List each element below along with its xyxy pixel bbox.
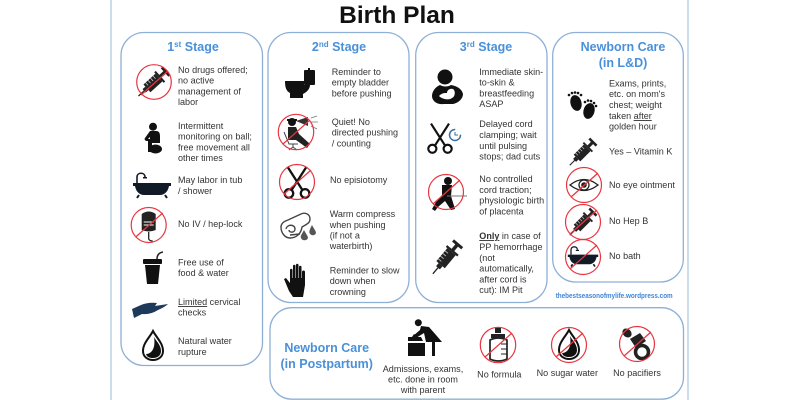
text: cord traction: of placenta: [479, 206, 525, 216]
icon: warm towel: [281, 213, 316, 240]
text: warm compress: Warm compress: [330, 209, 396, 219]
text: no drugs: No drugs offered;: [178, 65, 248, 75]
icon: no eye ointment: [566, 168, 602, 202]
text: hemorrhage: in case of: [499, 231, 541, 241]
text: water rupture: Natural water: [178, 336, 232, 346]
text: admissions: Admissions, exams,: [383, 364, 463, 374]
icon: no episiotomy: [280, 164, 314, 200]
icon: quiet no directed pushing: [278, 114, 318, 150]
text: no drugs: labor: [178, 97, 198, 107]
icon: changing table: [408, 319, 442, 356]
text: exams: after: [634, 111, 652, 121]
text: skin to skin: breastfeeding: [479, 88, 534, 98]
text: eye ointment: No eye ointment: [609, 180, 675, 190]
panel: 1st stage: [121, 32, 262, 366]
heading: 2nd stage: 2: [312, 40, 319, 54]
text: slow down: crowning: [330, 287, 366, 297]
text: skin to skin: ASAP: [479, 99, 503, 109]
icon: cup: [143, 252, 163, 284]
icon: no pacifiers: [620, 326, 654, 362]
text: tub: May labor in tub: [178, 175, 242, 185]
text: monitoring: free movement all: [178, 142, 250, 152]
text: hemorrhage: PP hemorrhage: [479, 242, 543, 252]
icon: raised hand: [284, 264, 305, 297]
text: warm compress: (if not a: [330, 231, 361, 241]
text: monitoring: other times: [178, 153, 223, 163]
icon: baby feet: [568, 91, 597, 120]
text: hemorrhage: after cord is: [479, 274, 527, 284]
text: cord traction: physiologic birth: [479, 196, 544, 206]
text: water rupture: rupture: [178, 347, 207, 357]
text: food and water: Free use of: [178, 258, 224, 268]
text: quiet: Quiet! No: [332, 117, 370, 127]
text: bladder: before pushing: [332, 88, 392, 98]
text: cord traction: cord traction;: [479, 185, 532, 195]
text: cervical checks: cervical: [207, 297, 240, 307]
text: admissions: etc. done in room: [388, 374, 458, 384]
text: hemorrhage: cut): IM Pit: [479, 285, 523, 295]
text: vitamin K: Yes – Vitamin K: [609, 146, 672, 156]
text: no IV: No IV / hep-lock: [178, 219, 243, 229]
panel: 2nd stage: [268, 32, 409, 302]
text: hemorrhage: (not: [479, 253, 495, 263]
text: skin to skin: Immediate skin-: [479, 67, 543, 77]
text: hep B: No Hep B: [609, 216, 648, 226]
text: admissions: with parent: [400, 385, 446, 395]
text: hemorrhage: Only: [479, 231, 499, 241]
text: warm compress: when pushing: [329, 220, 386, 230]
heading: 2nd stage: nd: [319, 40, 329, 49]
text: slow down: Reminder to slow: [330, 266, 400, 276]
icon: no formula: [480, 327, 516, 363]
text: bladder: Reminder to: [332, 67, 381, 77]
text: bath: No bath: [609, 251, 641, 261]
text: cervical checks: Limited: [178, 297, 207, 307]
source url: thebestseasonofmylife.wordpress.com: [556, 293, 673, 300]
text: no drugs: no active: [178, 76, 214, 86]
icon: water drop: [143, 331, 163, 360]
heading: 3rd stage: Stage: [475, 40, 512, 54]
icon: no drugs syringe: [134, 65, 171, 101]
text: slow down: down when: [330, 276, 375, 286]
text: hemorrhage: automatically,: [479, 264, 534, 274]
heading: newborn care L&D: (in L&D): [599, 56, 647, 70]
heading: newborn care postpartum: Newborn Care: [284, 341, 369, 355]
text: formula: No formula: [477, 370, 522, 380]
icon: bathtub: [133, 173, 171, 198]
text: delayed clamping: clamping; wait: [479, 130, 537, 140]
text: delayed clamping: until pulsing: [479, 141, 527, 151]
text: food and water: food & water: [178, 268, 229, 278]
text: tub: / shower: [178, 186, 212, 196]
text: cervical checks: checks: [178, 308, 207, 318]
text: monitoring: Intermittent: [178, 121, 224, 131]
text: pacifiers: No pacifiers: [613, 368, 661, 378]
heading: newborn care postpartum: (in Postpartum): [281, 357, 373, 371]
icon: hand: [132, 303, 168, 318]
panel: 3rd stage: [416, 32, 547, 302]
icon: no bath: [566, 240, 600, 274]
text: bladder: empty bladder: [332, 78, 389, 88]
text: exams: taken: [609, 111, 634, 121]
panel: newborn care postpartum: [270, 308, 684, 399]
icon: syringe: [427, 238, 464, 279]
text: exams: etc. on mom's: [609, 89, 666, 99]
heading: 1st stage: Stage: [181, 40, 219, 54]
text: monitoring: monitoring on ball;: [178, 132, 252, 142]
text: quiet: / counting: [332, 138, 371, 148]
text: episiotomy: No episiotomy: [330, 175, 388, 185]
text: exams: chest; weight: [609, 100, 662, 110]
heading: 3rd stage: rd: [467, 40, 475, 49]
heading: 3rd stage: 3: [460, 40, 467, 54]
icon: breastfeeding: [432, 70, 463, 104]
icon: no IV: [131, 208, 166, 242]
heading: 2nd stage: Stage: [329, 40, 366, 54]
text: sugar water: No sugar water: [537, 368, 598, 378]
text: quiet: directed pushing: [332, 128, 398, 138]
icon: scissors and clock: [428, 124, 460, 153]
icon: no hep B: [565, 204, 600, 240]
icon: no cord traction: [428, 174, 467, 211]
text: exams: golden hour: [609, 122, 657, 132]
heading: 1st stage: 1: [167, 40, 174, 54]
text: delayed clamping: Delayed cord: [479, 119, 533, 129]
icon: no sugar water: [552, 328, 586, 362]
heading: newborn care L&D: Newborn Care: [581, 40, 665, 54]
text: delayed clamping: stops; dad cuts: [479, 152, 541, 162]
text: warm compress: waterbirth): [329, 241, 372, 251]
icon: person on ball: [145, 123, 162, 154]
text: exams: Exams, prints,: [609, 78, 666, 88]
text: cord traction: No controlled: [479, 174, 533, 184]
page frame: [111, 0, 688, 400]
heading: 1st stage: st: [174, 40, 182, 49]
title: Birth Plan: [339, 2, 455, 29]
icon: toilet: [285, 68, 315, 98]
text: skin to skin: to-skin &: [479, 78, 515, 88]
icon: vitamin K syringe: [565, 137, 598, 170]
panel: newborn care L&D: [553, 32, 683, 282]
text: no drugs: management of: [178, 86, 241, 96]
